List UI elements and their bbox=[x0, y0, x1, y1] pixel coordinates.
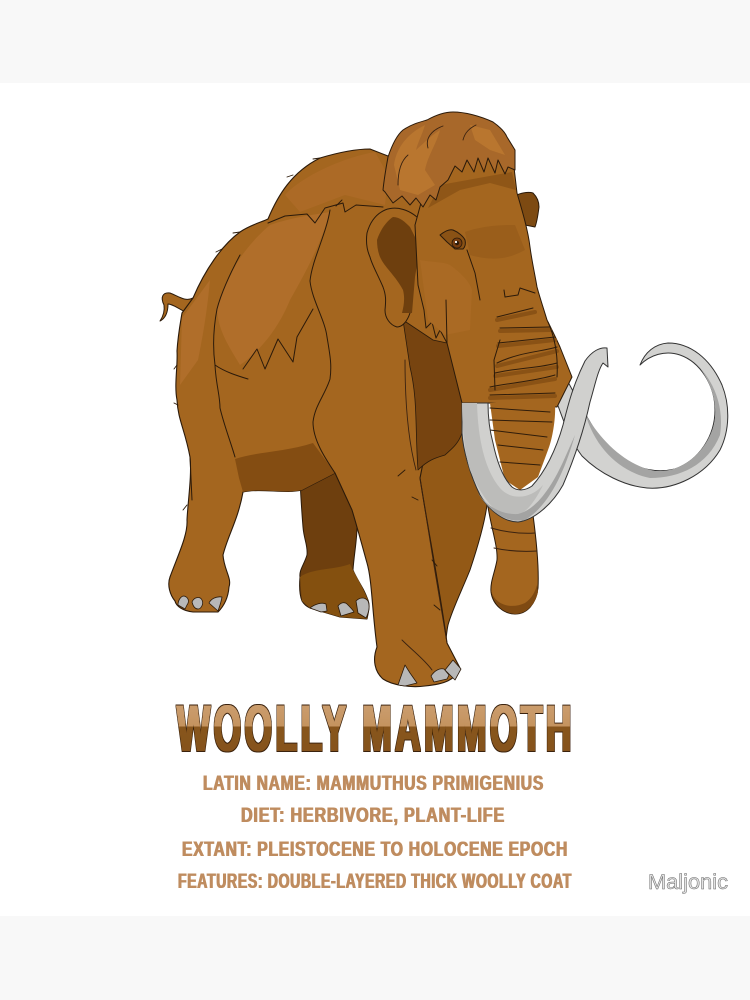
rump light fur patch bbox=[217, 212, 330, 365]
back light fur patch bbox=[285, 152, 388, 212]
tail-side light fur patch bbox=[180, 280, 210, 385]
watermark: Maljonic bbox=[648, 871, 728, 894]
face lines bbox=[446, 250, 557, 390]
illustration: woolly mammoth bbox=[160, 112, 728, 687]
belly shadow bbox=[235, 443, 335, 492]
latin name: LATIN NAME: MAMMUTHUS PRIMIGENIUS bbox=[203, 772, 544, 795]
front leg inner fur bbox=[402, 360, 447, 670]
eye bbox=[440, 230, 465, 249]
front tusk bbox=[462, 348, 608, 522]
dark rear middle leg bbox=[300, 470, 369, 619]
lower trunk bbox=[487, 500, 538, 614]
back tusk bbox=[557, 343, 728, 488]
diet: DIET: HERBIVORE, PLANT-LIFE bbox=[241, 804, 505, 827]
ear bbox=[366, 208, 423, 327]
tail bbox=[160, 293, 193, 321]
right front leg bbox=[405, 420, 487, 650]
fur lines bbox=[190, 203, 383, 500]
far ear bbox=[517, 192, 539, 227]
outline fur ticks bbox=[174, 158, 440, 610]
chest dark bbox=[403, 320, 462, 470]
extant: EXTANT: PLEISTOCENE TO HOLOCENE EPOCH bbox=[182, 838, 568, 861]
toenails bbox=[178, 596, 461, 686]
trunk lower wrinkles bbox=[490, 408, 552, 465]
trunk lower wrap bbox=[490, 403, 555, 490]
trunk wrinkles bbox=[490, 308, 557, 398]
head bbox=[415, 150, 572, 407]
body silhouette bbox=[169, 149, 460, 687]
hair hump bbox=[383, 112, 515, 207]
info lines bbox=[178, 772, 572, 893]
